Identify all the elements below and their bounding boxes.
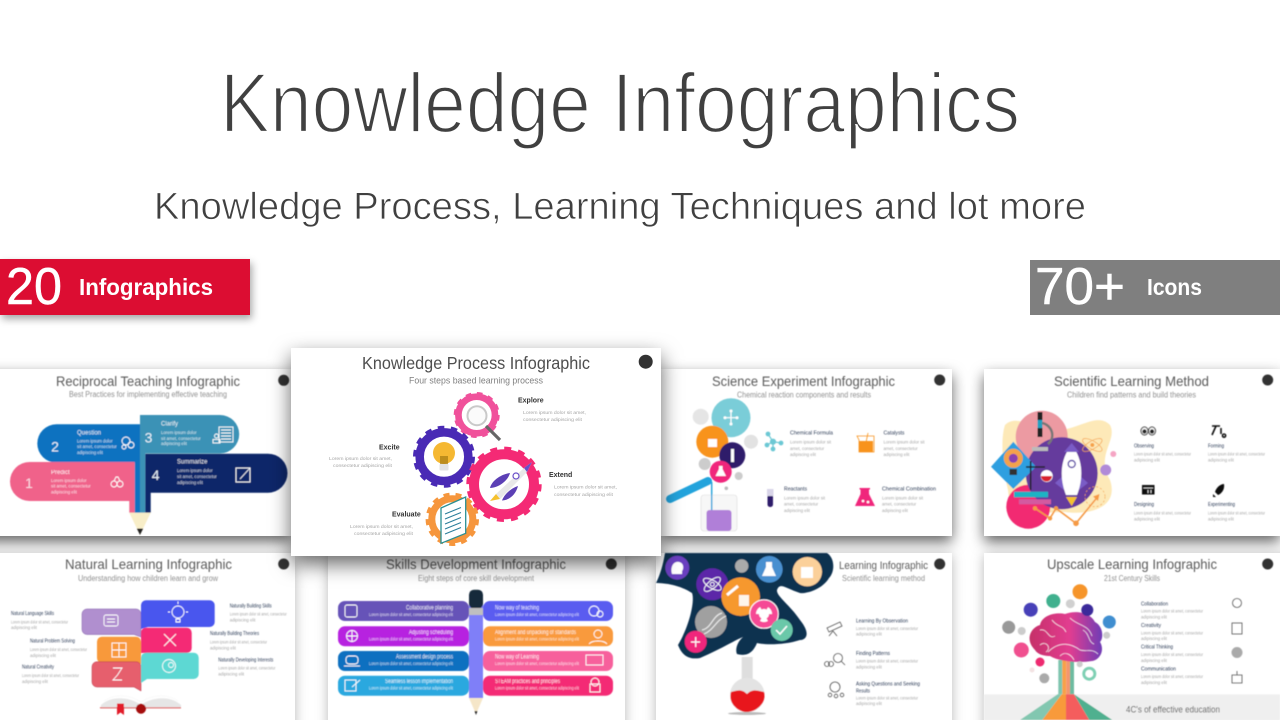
pencil divider [469, 590, 483, 715]
badge: 70+ icons: Icons [1147, 274, 1202, 300]
item: designing [1134, 502, 1191, 522]
icon: flask [855, 488, 875, 506]
labels left [11, 611, 87, 684]
labels left: adipiscing elit [22, 679, 49, 684]
beaker and test tube [670, 481, 737, 531]
icon: layout [1142, 485, 1154, 494]
icon: test tube [767, 489, 774, 507]
item: asking questions [828, 682, 920, 706]
item: creativity: Creativity [1141, 623, 1161, 629]
label: explore: consectetur adipiscing elit [523, 417, 583, 423]
gear: extend [469, 449, 539, 519]
labels right: Naturally Building Theories [210, 631, 259, 637]
subheading: Children find patterns and build theories [1067, 390, 1196, 400]
item: chemical formula [790, 430, 834, 457]
step 2 question [37, 424, 140, 513]
item: creativity [1141, 623, 1242, 641]
left bars: Assessment design process [396, 654, 453, 660]
step 2 question: adipiscing elit [77, 450, 104, 455]
item: finding patterns [824, 651, 918, 670]
heading: Learning Infographic [839, 560, 928, 572]
left bars: Seamless lesson implementation [385, 679, 453, 685]
item: designing: Lorem ipsum dolor sit amet, consectetur [1134, 510, 1191, 516]
item: reactants: amet, consectetur [784, 502, 819, 506]
item: catalysts [884, 430, 925, 457]
item: experimenting: adipiscing elit [1208, 516, 1235, 522]
badge: 20 infographics: Infographics [79, 274, 213, 300]
item: reactants [784, 486, 826, 513]
heading: Scientific Learning Method [1054, 373, 1209, 389]
page number [278, 375, 289, 386]
item: reactants: adipiscing elit [784, 508, 811, 513]
label: excite: Lorem ipsum dolor sit amet, [329, 456, 392, 462]
step 2 question: Question [77, 430, 101, 436]
subheading: Understanding how children learn and grow [78, 574, 218, 583]
label: extend: Extend [549, 472, 572, 479]
labels left: Lorem ipsum dolor sit amet, consectetur [11, 620, 68, 624]
left bars: Lorem ipsum dolor sit amet, consectetur adipiscing elit [369, 661, 454, 666]
item: collaboration: adipiscing elit [1141, 614, 1168, 619]
label: explore [518, 398, 586, 423]
stacked speech blocks [82, 600, 215, 691]
item: critical thinking: Lorem ipsum dolor sit amet, consectetur [1141, 652, 1203, 657]
item: designing: adipiscing elit [1134, 516, 1161, 522]
labels right: Lorem ipsum dolor sit amet, consectetur [210, 640, 267, 644]
badge: 20 infographics: 20 [6, 258, 62, 316]
heading: Knowledge Process Infographic [362, 353, 590, 373]
page number [1262, 558, 1273, 570]
item: asking questions: adipiscing elit [856, 701, 883, 706]
floating bubbles [1002, 584, 1116, 683]
item: critical thinking: adipiscing elit [1141, 658, 1168, 663]
step 4 summarize: Lorem ipsum dolor [177, 468, 213, 473]
step 1 predict: Lorem ipsum dolor [51, 478, 87, 483]
item: creativity: Lorem ipsum dolor sit amet, consectetur [1141, 630, 1203, 635]
badge: 70+ icons [1030, 258, 1280, 316]
right bars: Lorem ipsum dolor sit amet, consectetur adipiscing elit [495, 636, 580, 642]
labels right: adipiscing elit [230, 618, 256, 622]
panel: scientific learning method [984, 369, 1280, 536]
step 4 summarize: adipiscing elit [177, 480, 204, 485]
left bars [338, 601, 469, 696]
item: catalysts: adipiscing elit [884, 452, 910, 457]
panel: learning infographic [656, 553, 952, 720]
item: chemical combination [882, 486, 936, 513]
label: extend: consectetur adipiscing elit [554, 492, 614, 498]
label: explore: Explore [518, 398, 544, 405]
item: learning by observation: adipiscing elit [856, 632, 883, 636]
panel: science experiment [661, 369, 952, 536]
item: communication: Communication [1141, 666, 1176, 672]
item: chemical formula: Chemical Formula [790, 430, 834, 436]
step 4 summarize: Summarize [177, 459, 208, 465]
science illustration [991, 411, 1116, 529]
badge: 20 infographics [0, 258, 250, 316]
item: learning by observation [827, 619, 918, 636]
right bars: Now way of Learning [495, 654, 539, 660]
heading: Natural Learning Infographic [65, 556, 232, 572]
subheading: 21st Century Skills [1104, 574, 1160, 583]
step 3 clarify [140, 415, 239, 513]
item: catalysts: Lorem ipsum dolor sit [884, 440, 925, 444]
panel: natural learning [0, 553, 295, 720]
item: chemical combination: Chemical Combination [882, 486, 936, 492]
footer band: 4C's of effective education [1126, 705, 1220, 715]
step 4 summarize: 4 [152, 467, 160, 483]
item: chemical formula: amet, consectetur [790, 446, 825, 451]
label: excite [329, 444, 400, 469]
footer band [984, 694, 1280, 720]
splash with science bubbles [656, 553, 833, 658]
item: catalysts: amet, consectetur [884, 446, 918, 451]
page number [934, 374, 945, 386]
item: asking questions: Results [856, 688, 870, 694]
item: chemical combination: adipiscing elit [882, 508, 909, 513]
right bars: Lorem ipsum dolor sit amet, consectetur adipiscing elit [495, 661, 580, 666]
item: observing: Observing [1134, 444, 1154, 450]
labels right: adipiscing elit [218, 672, 245, 676]
labels right: Lorem ipsum dolor sit amet, consectetur [230, 612, 287, 616]
label: extend: Lorem ipsum dolor sit amet, [554, 485, 617, 491]
item: creativity: adipiscing elit [1141, 636, 1168, 641]
gear: evaluate [428, 495, 477, 544]
item: reactants: Lorem ipsum dolor sit [784, 496, 826, 500]
item: observing [1134, 444, 1191, 462]
heading: Skills Development Infographic [386, 556, 566, 572]
item: chemical combination: amet, consectetur [882, 502, 917, 506]
label: extend [549, 472, 617, 498]
item: learning by observation: Learning By Observation [856, 619, 908, 625]
heading: Upscale Learning Infographic [1047, 556, 1217, 572]
label: evaluate: consectetur adipiscing elit [354, 531, 414, 537]
subheading: Chemical reaction components and results [737, 390, 871, 400]
item: observing: adipiscing elit [1134, 458, 1161, 462]
item: forming: adipiscing elit [1208, 458, 1235, 462]
label: evaluate: Lorem ipsum dolor sit amet, [350, 524, 413, 530]
subheading: Eight steps of core skill development [418, 574, 535, 583]
gear: explore [456, 394, 500, 440]
bubbles [693, 398, 758, 490]
step 3 clarify: adipiscing elit [161, 441, 188, 446]
step 3 clarify: sit amet, consectetur [161, 436, 201, 441]
right bars [483, 601, 613, 696]
subheading: Best Practices for implementing effective teaching [69, 390, 227, 399]
icon: eyes [1141, 427, 1156, 435]
label: evaluate [350, 512, 421, 537]
step 4 summarize [145, 454, 288, 513]
item: communication [1141, 666, 1242, 685]
labels left: adipiscing elit [30, 653, 57, 658]
item: collaboration: Collaboration [1141, 601, 1168, 607]
subheading: Scientific learning method [842, 574, 925, 583]
left bars: Lorem ipsum dolor sit amet, consectetur adipiscing elit [369, 612, 454, 617]
subtitle: Knowledge Process, Learning Techniques and lot more [154, 186, 1086, 228]
labels left: Natural Creativity [22, 665, 54, 671]
labels right [210, 603, 287, 676]
labels left: Natural Problem Solving [30, 639, 75, 645]
item: critical thinking: Critical Thinking [1141, 644, 1173, 650]
panel: skills development [328, 553, 625, 720]
item: observing: Lorem ipsum dolor sit amet, consectetur [1134, 452, 1191, 456]
right bars: STEAM practices and principles [495, 679, 560, 685]
panel: upscale learning [984, 553, 1280, 720]
item: collaboration: Lorem ipsum dolor sit amet, consectetur [1141, 608, 1203, 614]
item: forming: Forming [1208, 444, 1224, 450]
page number [1262, 374, 1273, 386]
icon: molecule [765, 432, 783, 451]
item: critical thinking [1141, 644, 1242, 663]
step 2 question: sit amet, consectetur [77, 444, 117, 449]
step 1 predict: adipiscing elit [51, 489, 78, 494]
labels right: Naturally Building Skills [230, 603, 272, 609]
right bars: Now way of teaching [495, 606, 539, 612]
right bars: Lorem ipsum dolor sit amet, consectetur adipiscing elit [495, 612, 580, 617]
step 1 predict [10, 462, 135, 513]
item: finding patterns: adipiscing elit [856, 664, 883, 670]
right bars: Lorem ipsum dolor sit amet, consectetur adipiscing elit [495, 686, 580, 690]
icon: beaker [857, 433, 874, 452]
step 3 clarify: Clarify [161, 421, 178, 427]
item: experimenting: Experimenting [1208, 502, 1235, 508]
left bars: Lorem ipsum dolor sit amet, consectetur adipiscing elit [369, 686, 454, 690]
panel: reciprocal teaching [0, 369, 291, 536]
item: forming [1208, 444, 1265, 462]
item: reactants: Reactants [784, 486, 807, 492]
step 3 clarify: Lorem ipsum dolor [161, 430, 197, 435]
subheading: Four steps based learning process [409, 376, 543, 386]
item: designing: Designing [1134, 502, 1154, 508]
gear: excite [416, 428, 472, 485]
item: chemical formula: Lorem ipsum dolor sit [790, 440, 832, 444]
item: asking questions: Asking Questions and Seeking [856, 682, 920, 688]
labels left: Natural Language Skills [11, 611, 54, 617]
item: learning by observation: Lorem ipsum dolor sit amet, consectetur [856, 626, 918, 631]
item: communication: adipiscing elit [1141, 680, 1168, 685]
label: excite: consectetur adipiscing elit [333, 463, 393, 469]
labels left: Lorem ipsum dolor sit amet, consectetur [30, 647, 87, 652]
step 2 question: Lorem ipsum dolor [77, 438, 113, 443]
page number [606, 558, 617, 570]
flask [728, 657, 766, 715]
left bars: Lorem ipsum dolor sit amet, consectetur adipiscing elit [369, 636, 454, 642]
item: catalysts: Catalysts [884, 430, 905, 436]
item: finding patterns: Lorem ipsum dolor sit amet, consectetur [856, 658, 918, 664]
step 1 predict: Predict [51, 470, 70, 476]
title: Knowledge Infographics [220, 56, 1020, 150]
item: chemical combination: Lorem ipsum dolor sit [882, 496, 924, 500]
step 2 question: 2 [51, 439, 59, 455]
page number [278, 558, 289, 570]
step 1 predict: sit amet, consectetur [51, 484, 91, 489]
item: communication: Lorem ipsum dolor sit amet, consectetur [1141, 674, 1203, 679]
right bars: Alignment and unpacking of standards [495, 630, 576, 636]
labels right: Naturally Developing Interests [218, 657, 273, 663]
step 4 summarize: sit amet, consectetur [177, 474, 217, 479]
page number [934, 558, 945, 570]
page number [639, 355, 653, 369]
labels right: adipiscing elit [210, 646, 237, 650]
left bars: Collaborative planning [406, 606, 453, 612]
icon: small rocket [1213, 484, 1224, 497]
item: collaboration [1141, 598, 1242, 619]
left bars: Adjusting scheduling [409, 630, 453, 636]
label: evaluate: Evaluate [392, 512, 421, 519]
heading: Reciprocal Teaching Infographic [56, 373, 240, 389]
label: explore: Lorem ipsum dolor sit amet, [523, 410, 586, 416]
badge: 70+ icons: 70+ [1035, 258, 1125, 316]
icon: hammer [1212, 426, 1226, 437]
heading: Science Experiment Infographic [712, 373, 895, 389]
panel: knowledge process [291, 348, 661, 556]
item: asking questions: Lorem ipsum dolor sit amet, consectetur [856, 696, 918, 700]
item: experimenting [1208, 502, 1265, 522]
label: excite: Excite [379, 444, 400, 451]
brain tree [1020, 612, 1112, 720]
item: finding patterns: Finding Patterns [856, 651, 890, 657]
open book [100, 696, 181, 715]
labels left: adipiscing elit [11, 625, 38, 630]
step 1 predict: 1 [25, 475, 33, 491]
labels left: Lorem ipsum dolor sit amet, consectetur [22, 673, 79, 678]
item: chemical formula: adipiscing elit [790, 452, 817, 457]
step 3 clarify: 3 [145, 430, 153, 446]
labels right: Lorem ipsum dolor sit amet, consectetur [218, 666, 276, 671]
pencil tip [129, 513, 151, 535]
